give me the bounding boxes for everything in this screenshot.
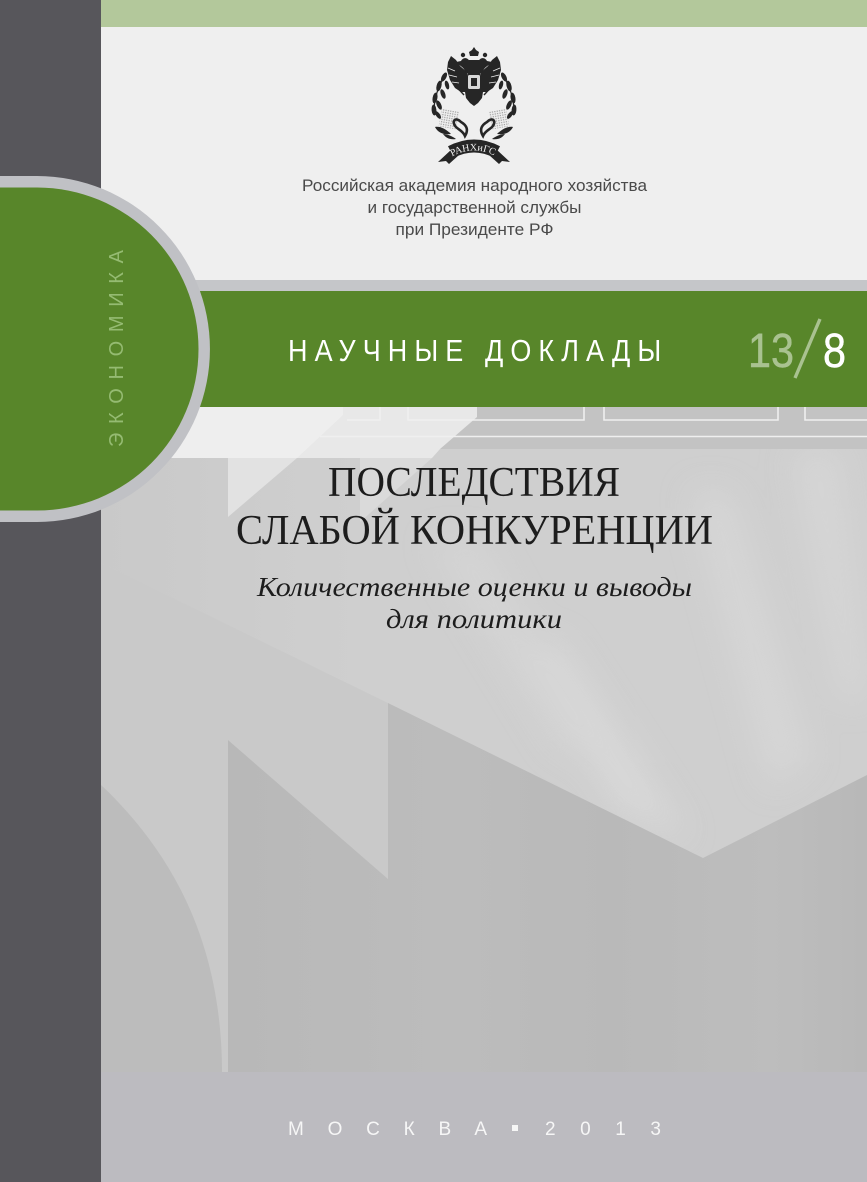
publisher city and year <box>288 1119 661 1140</box>
arc shape bottom left <box>101 785 222 1073</box>
issue number: 8 <box>823 325 846 378</box>
green circle badge <box>0 176 210 522</box>
panel: patterned grey background <box>101 407 867 1073</box>
window frame lines <box>320 407 867 436</box>
crown <box>469 47 479 56</box>
subtitle <box>256 572 692 634</box>
academy name: при Президенте РФ <box>396 221 554 239</box>
diagonal pale panel <box>360 458 432 522</box>
pale wedge under the band <box>101 407 477 458</box>
grey window band <box>430 407 867 450</box>
upper field with light rays <box>228 449 867 522</box>
lower dark panel <box>228 700 867 1073</box>
issue number: 13 <box>748 325 794 378</box>
ribbon band <box>451 146 497 152</box>
triangle highlight <box>228 458 297 517</box>
soft rays <box>430 450 867 840</box>
eagle shield <box>468 75 480 89</box>
ribbon lettering: РАНХиГС <box>450 144 496 156</box>
publisher city and year: 2013 <box>545 1119 661 1140</box>
subtitle: для политики <box>386 604 562 634</box>
issue number <box>748 319 846 378</box>
main title: ПОСЛЕДСТВИЯ <box>328 460 620 506</box>
academy name: Российская академия народного хозяйства <box>302 177 648 195</box>
subtitle: Количественные оценки и выводы <box>256 572 692 602</box>
green title band <box>190 291 867 407</box>
category label: ЭКОНОМИКА <box>106 249 128 447</box>
left dark sidebar <box>0 0 101 1182</box>
main title <box>236 460 713 554</box>
academy name <box>302 177 648 239</box>
academy name: и государственной службы <box>368 199 582 217</box>
series name: НАУЧНЫЕ ДОКЛАДЫ <box>288 334 661 368</box>
main title: СЛАБОЙ КОНКУРЕНЦИИ <box>236 508 713 554</box>
bright wedge under the band <box>101 407 343 458</box>
grey strip above band <box>190 280 867 291</box>
left band <box>101 563 388 1073</box>
publisher city and year: МОСКВА <box>288 1119 487 1140</box>
eagle body <box>465 60 483 106</box>
footer panel <box>101 1072 867 1182</box>
icon: academy crest <box>432 47 516 164</box>
top green stripe <box>101 0 867 27</box>
section box at the left <box>101 458 360 758</box>
